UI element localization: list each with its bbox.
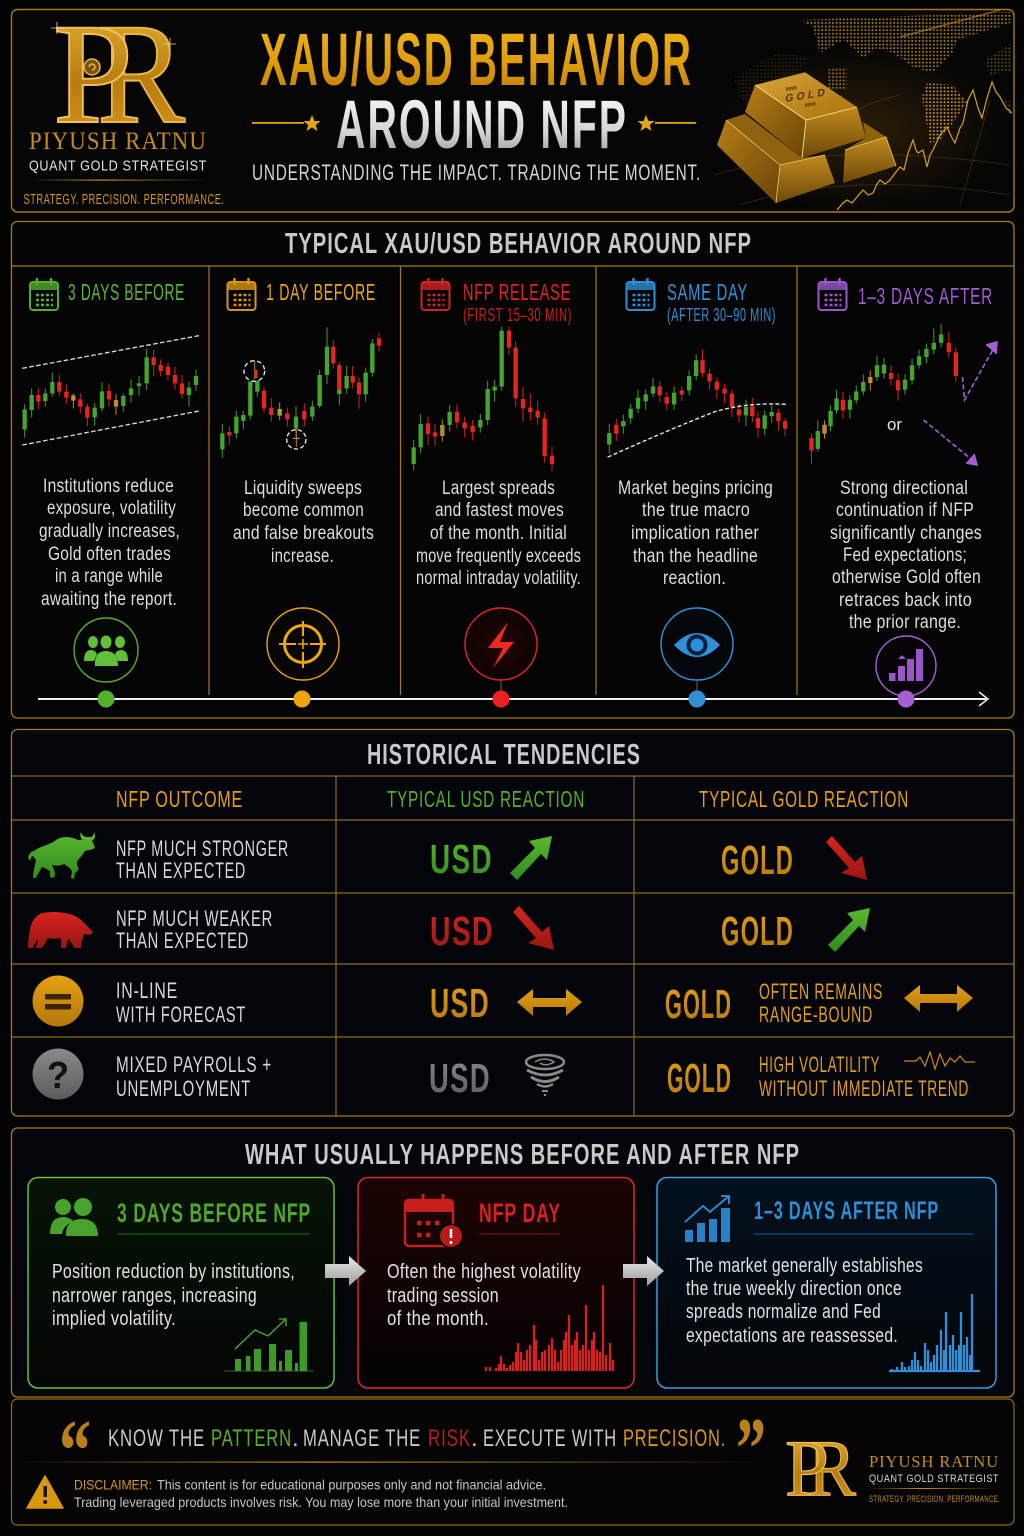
card: NFP day [358, 1178, 634, 1388]
disclaimer: Trading leveraged products involves risk. You may lose more than your initial investment. [74, 1494, 568, 1510]
gold down: GOLD [721, 837, 794, 883]
label: or: or [887, 415, 902, 434]
table head [116, 786, 909, 812]
card: 3 days before [28, 1178, 334, 1388]
text: and false breakouts [233, 523, 374, 544]
text [387, 1261, 581, 1330]
right lower bar [843, 122, 896, 183]
label: NFP MUCH WEAKER [116, 906, 273, 931]
slogan: . [292, 1425, 300, 1452]
text: than the headline [633, 546, 758, 567]
top bar [745, 72, 866, 158]
label [116, 906, 273, 953]
column: 1 day before [222, 278, 379, 680]
text: Position reduction by institutions, [52, 1261, 295, 1283]
sublabel: (AFTER 30–90 MIN) [667, 305, 776, 325]
gold range-bound: RANGE-BOUND [759, 1002, 873, 1027]
icon: warning [27, 1476, 63, 1508]
sublabel: (FIRST 15–30 MIN) [463, 305, 572, 325]
text: and fastest moves [435, 500, 564, 521]
disclaimer: This content is for educational purposes only and not financial advice. [157, 1476, 546, 1492]
icon: equals [32, 976, 84, 1026]
gold volatile [667, 1052, 975, 1101]
icon: bull [28, 832, 95, 879]
text: the true macro [642, 500, 750, 521]
text: Often the highest volatility [387, 1261, 581, 1283]
text: spreads normalize and Fed [686, 1301, 881, 1323]
text: Fed expectations; [843, 545, 967, 566]
top bar: 9999 [785, 85, 798, 93]
heading: HISTORICAL TENDENCIES [367, 739, 641, 771]
table head: TYPICAL GOLD REACTION [699, 786, 909, 812]
text: in a range while [55, 566, 163, 587]
brand name: PIYUSH RATNU [29, 128, 207, 155]
chart: liquidity sweeps [222, 327, 379, 458]
icon: calendar purple [818, 278, 846, 310]
text: the true weekly direction once [686, 1278, 902, 1300]
panel: typical behavior [12, 222, 1014, 718]
gold range-bound: OFTEN REMAINS [759, 979, 883, 1004]
chart: rising spikes [889, 1294, 980, 1371]
label: THAN EXPECTED [116, 858, 246, 883]
label: UNEMPLOYMENT [116, 1076, 251, 1101]
chart: rising bars [224, 1319, 314, 1371]
text: otherwise Gold often [832, 567, 981, 588]
brand small: PIYUSH RATNU [869, 1452, 999, 1471]
arrow: green to red [325, 1256, 366, 1286]
USD flat: USD [430, 980, 490, 1026]
chart: volatility spikes [486, 1285, 613, 1371]
brand role: QUANT GOLD STRATEGIST [29, 158, 207, 174]
slogan [108, 1425, 726, 1452]
panel: footer [12, 1399, 1014, 1525]
brand tagline: STRATEGY. PRECISION. PERFORMANCE. [24, 191, 224, 208]
subtitle: UNDERSTANDING THE IMPACT. TRADING THE MOMENT. [252, 160, 701, 185]
icon: calendar red [422, 278, 450, 310]
chart: continuation candles [811, 324, 956, 464]
text [618, 478, 773, 589]
text: gradually increases, [39, 521, 180, 542]
icon: tornado [526, 1055, 564, 1095]
text: move frequently exceeds [416, 546, 581, 567]
column: NFP release [414, 278, 581, 680]
text: Liquidity sweeps [244, 478, 362, 499]
USD flat [430, 980, 582, 1026]
row: in line [32, 976, 973, 1027]
text [39, 476, 180, 610]
icon: question: ? [47, 1055, 69, 1097]
text: of the month. Initial [430, 523, 567, 544]
text: expectations are reassessed. [686, 1325, 898, 1347]
USD uncertain: USD [429, 1055, 491, 1101]
label: NFP RELEASE [463, 279, 571, 305]
text: Institutions reduce [43, 476, 174, 497]
title line 2: AROUND NFP [336, 86, 628, 163]
gold up: GOLD [721, 908, 794, 954]
icon: calendar alert [405, 1194, 464, 1248]
row: much stronger [28, 832, 867, 883]
arrow: downward path [924, 420, 977, 465]
timeline [38, 681, 988, 708]
icon: bars and arrow [685, 1196, 730, 1242]
panel: header [12, 0, 1014, 215]
slogan: RISK [428, 1425, 471, 1452]
table head: NFP OUTCOME [116, 786, 243, 812]
icon: calendar blue [626, 278, 654, 310]
panel: before and after [12, 1128, 1014, 1397]
icon: bear [28, 912, 93, 948]
slogan: EXECUTE WITH [483, 1425, 617, 1452]
gold range-bound [665, 979, 973, 1027]
slogan: MANAGE THE [303, 1425, 421, 1452]
quote mark open: “ [59, 1403, 91, 1500]
label: NFP MUCH STRONGER [116, 836, 289, 861]
disclaimer [74, 1476, 568, 1510]
column: same day [608, 278, 787, 680]
icon: eye [661, 608, 733, 680]
text [416, 478, 581, 589]
heading: TYPICAL XAU/USD BEHAVIOR AROUND NFP [285, 228, 752, 260]
gold volatile: HIGH VOLATILITY [759, 1052, 880, 1077]
heading: WHAT USUALLY HAPPENS BEFORE AND AFTER NFP [245, 1139, 800, 1171]
USD up: USD [430, 836, 493, 882]
row: mixed [32, 1048, 975, 1101]
icon: crosshair [267, 608, 339, 680]
label: MIXED PAYROLLS + [116, 1052, 272, 1077]
icon: lightning bolt [465, 608, 537, 680]
icon: people [50, 1198, 98, 1236]
text: significantly changes [830, 523, 982, 544]
text [233, 478, 374, 567]
label [116, 978, 246, 1027]
text: Largest spreads [442, 478, 555, 499]
icon: calendar green [30, 278, 58, 310]
label: WITH FORECAST [116, 1002, 246, 1027]
brand small: QUANT GOLD STRATEGIST [869, 1473, 999, 1485]
text [830, 478, 982, 633]
label: IN-LINE [116, 978, 178, 1003]
slogan: KNOW THE [108, 1425, 205, 1452]
slogan: . [471, 1425, 479, 1452]
chart: pricing candles [608, 350, 787, 457]
text: normal intraday volatility. [416, 568, 581, 589]
icon: question [32, 1048, 84, 1100]
panel: historical tendencies [12, 730, 1014, 1116]
disclaimer: DISCLAIMER: [74, 1476, 152, 1492]
gold volatile: GOLD [667, 1055, 732, 1101]
text: become common [243, 500, 364, 521]
label: 3 DAYS BEFORE [68, 279, 185, 305]
USD down: USD [430, 908, 494, 954]
title: 3 DAYS BEFORE NFP [117, 1198, 311, 1228]
chart: range candles [22, 336, 199, 445]
quote mark close: ” [736, 1401, 766, 1498]
icon: rising bars [876, 636, 936, 696]
left lower bar [717, 114, 835, 203]
card: 1-3 days after [657, 1178, 996, 1388]
arrow: red to blue [623, 1256, 664, 1286]
text: retraces back into [839, 590, 972, 611]
logo: PR monogram [51, 0, 185, 154]
slogan: PRECISION. [623, 1425, 726, 1452]
top bar: 9999 [804, 101, 817, 109]
text: Gold often trades [48, 544, 171, 565]
label [116, 836, 289, 883]
text: implication rather [631, 523, 759, 544]
arrow: upward path [962, 342, 997, 400]
slogan: PATTERN [211, 1425, 292, 1452]
title ornaments [252, 115, 696, 131]
label [116, 1052, 272, 1101]
top bar: GOLD [785, 87, 826, 105]
text [686, 1255, 923, 1347]
USD uncertain [429, 1055, 564, 1101]
chart: spike candles [414, 327, 552, 471]
table head: TYPICAL USD REACTION [387, 786, 585, 812]
text: trading session [387, 1285, 499, 1307]
text: continuation if NFP [836, 500, 974, 521]
text: of the month. [387, 1308, 489, 1330]
text: awaiting the report. [41, 589, 177, 610]
text: the prior range. [849, 612, 961, 633]
text: Market begins pricing [618, 478, 773, 499]
text [52, 1261, 295, 1330]
logo small: P [785, 1425, 829, 1513]
brand small [869, 1452, 1000, 1505]
label: THAN EXPECTED [116, 928, 249, 953]
gold range-bound: GOLD [665, 981, 732, 1027]
text: Strong directional [840, 478, 968, 499]
text: exposure, volatility [47, 498, 176, 519]
text: increase. [271, 546, 334, 567]
label: 1 DAY BEFORE [266, 279, 376, 305]
column: 1-3 days after [811, 278, 997, 696]
label: SAME DAY [667, 279, 748, 305]
icon: institutions [74, 618, 138, 682]
icon: calendar amber [228, 278, 256, 310]
logo small: R [808, 1425, 857, 1513]
row: much weaker [28, 906, 870, 954]
column: 3 days before [22, 278, 199, 682]
text: implied volatility. [52, 1308, 176, 1330]
text: The market generally establishes [686, 1255, 923, 1277]
text: narrower ranges, increasing [52, 1285, 257, 1307]
logo small [785, 1425, 857, 1513]
text: reaction. [663, 568, 726, 589]
world map and market backdrop [710, 10, 1012, 215]
icon: gold bars [717, 72, 896, 203]
title: NFP DAY [479, 1198, 561, 1228]
